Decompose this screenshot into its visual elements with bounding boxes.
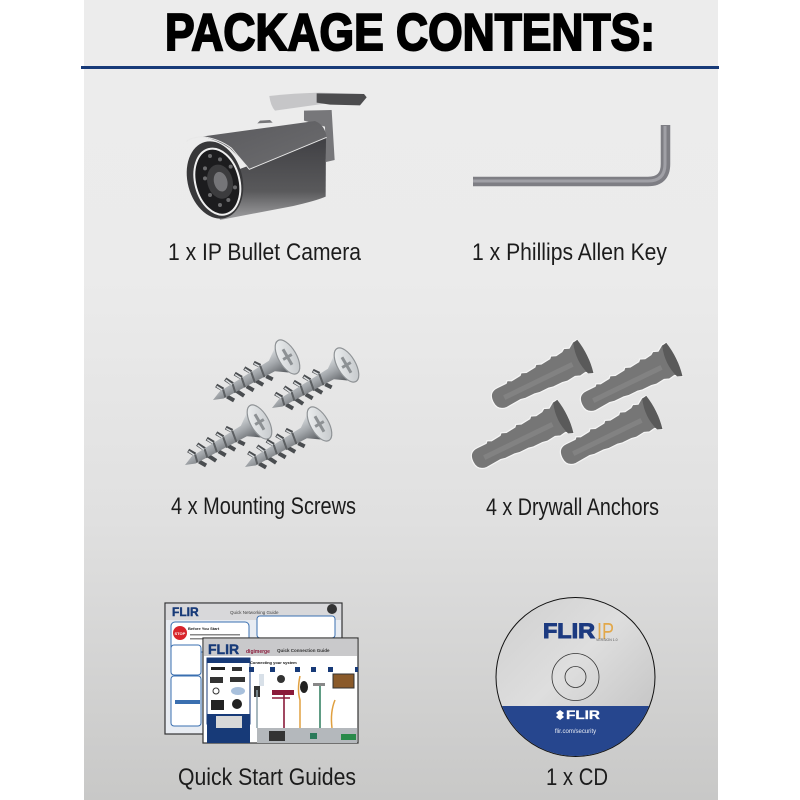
icon: software CD: FLIR [566, 710, 601, 722]
CD blue band [502, 706, 649, 756]
icon: software CD: flir.com/security [555, 729, 596, 735]
title rule [81, 66, 719, 69]
guide: networking sheet: Quick Networking Guide [230, 610, 279, 615]
label: CD: 1 x CD [546, 764, 608, 791]
guide: connection sheet: digimerge [246, 649, 270, 655]
icon: software CD: VERSION 1.0 [596, 638, 618, 642]
guide: networking sheet: STOP [174, 631, 186, 636]
label: anchors: 4 x Drywall Anchors [486, 494, 659, 521]
icon: mounting screws [176, 336, 364, 483]
background panel [84, 0, 718, 800]
icon: drywall anchors [465, 339, 684, 478]
icon: software CD: IP [597, 618, 614, 644]
label: allen key: 1 x Phillips Allen Key [472, 239, 667, 266]
CD logo: FLIR [543, 620, 595, 643]
label: guides: Quick Start Guides [178, 764, 356, 791]
icon: quick start guides [165, 603, 358, 743]
icon: allen key [473, 125, 666, 182]
guide: connection sheet: Connecting your system [250, 660, 297, 665]
guide: connection sheet [203, 638, 358, 743]
guide: networking sheet: FLIR [172, 605, 199, 619]
label: screws: 4 x Mounting Screws [171, 493, 356, 520]
icon: software CD [496, 598, 655, 756]
title: PACKAGE CONTENTS: [165, 4, 655, 62]
guide: networking sheet: Before You Start [188, 626, 220, 631]
label: camera: 1 x IP Bullet Camera [168, 239, 362, 266]
guide: networking sheet [165, 603, 342, 734]
guide: connection sheet: FLIR [208, 641, 239, 657]
icon: IP bullet camera [178, 93, 367, 225]
guide: connection sheet: Quick Connection Guide [277, 648, 330, 653]
